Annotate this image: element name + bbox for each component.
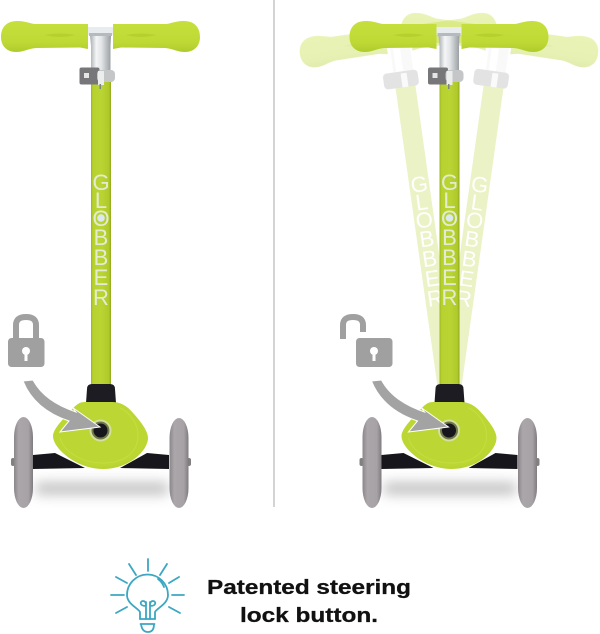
icon: open padlock bbox=[343, 317, 392, 367]
ghost: scooter tilted left: G bbox=[409, 171, 429, 198]
divider bbox=[274, 0, 275, 507]
ghost: scooter tilted right: B bbox=[460, 246, 478, 272]
scooter body bbox=[1, 21, 200, 508]
ghost: scooter tilted left: B bbox=[421, 245, 439, 272]
logo dot bbox=[97, 214, 105, 222]
icon: light bulb bbox=[111, 559, 184, 632]
arrow to lock button bbox=[23, 380, 100, 432]
ghost: scooter tilted right: G bbox=[470, 171, 490, 198]
ground shadow bbox=[384, 482, 516, 495]
pole logo: B bbox=[442, 225, 457, 250]
ghost: scooter tilted right: O bbox=[465, 207, 485, 234]
caption: Patented steering bbox=[207, 576, 411, 599]
ground shadow bbox=[36, 482, 168, 495]
pole logo: O bbox=[441, 206, 458, 231]
ghost: scooter tilted right bbox=[350, 11, 600, 414]
pole logo: O bbox=[92, 206, 110, 231]
ghost: scooter tilted right: R bbox=[454, 285, 473, 312]
panel: locked scooter bbox=[1, 21, 200, 508]
ghost: scooter tilted right: E bbox=[458, 265, 476, 292]
ghost: scooter tilted right: L bbox=[469, 189, 485, 216]
pole logo: B bbox=[94, 225, 108, 250]
pole logo: E bbox=[442, 265, 457, 290]
caption bbox=[207, 576, 411, 627]
ghost: scooter tilted right: B bbox=[463, 226, 481, 253]
caption: lock button. bbox=[240, 604, 378, 627]
panel: unlocked scooter bbox=[298, 11, 600, 508]
ghost: scooter tilted left: B bbox=[418, 226, 436, 252]
pole logo: R bbox=[442, 285, 457, 310]
ghost: scooter tilted left: O bbox=[414, 207, 434, 234]
pole logo: G bbox=[92, 170, 110, 195]
ghost: scooter tilted left: L bbox=[414, 189, 430, 216]
ghost: scooter tilted left: R bbox=[426, 285, 445, 312]
pole logo: R bbox=[93, 285, 109, 310]
logo dot bbox=[446, 214, 453, 222]
ghost: scooter tilted left: E bbox=[423, 265, 441, 292]
scooter body bbox=[350, 21, 548, 508]
pole logo: B bbox=[94, 245, 108, 270]
pole logo: B bbox=[442, 245, 457, 270]
pole logo: G bbox=[441, 170, 458, 195]
arrow to lock button bbox=[372, 380, 448, 432]
ghost: scooter tilted left bbox=[298, 11, 548, 414]
pole logo: L bbox=[443, 188, 456, 213]
icon: closed padlock bbox=[8, 317, 44, 367]
pole logo: L bbox=[95, 188, 107, 213]
pole logo: E bbox=[94, 265, 108, 290]
